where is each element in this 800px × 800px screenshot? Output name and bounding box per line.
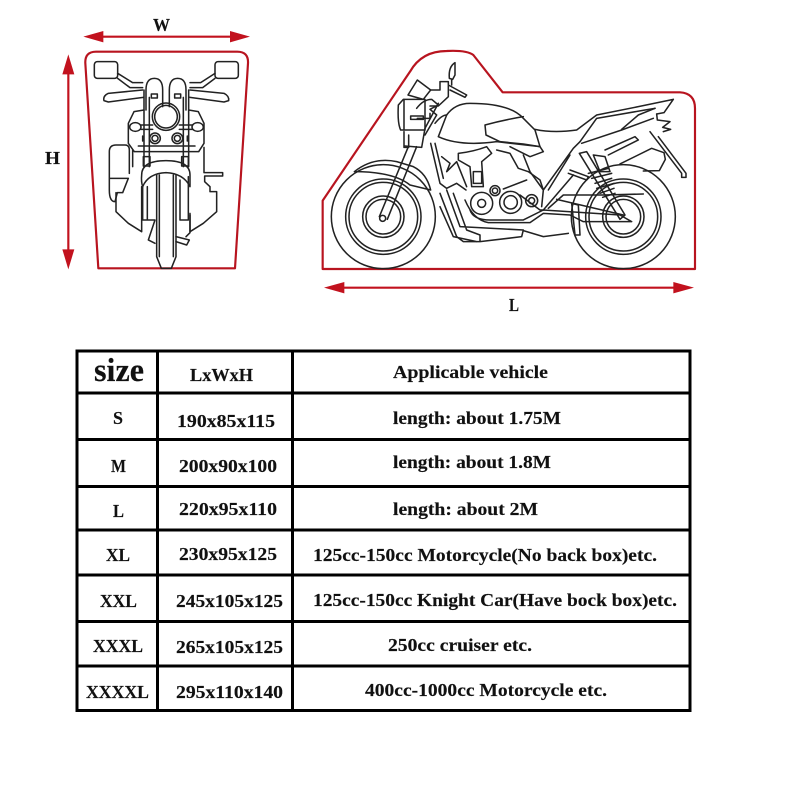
length arrow (324, 282, 694, 293)
row XXXL (93, 635, 532, 657)
row S: S (113, 408, 123, 428)
row XXXL: 250cc cruiser etc. (388, 635, 532, 655)
row L: 220x95x110 (179, 499, 277, 519)
row M: length: about 1.8M (393, 452, 551, 472)
row S (113, 408, 561, 431)
side cover outline (323, 51, 695, 269)
header row (94, 353, 548, 389)
row XXXXL: 295x110x140 (176, 682, 283, 702)
row XXL: 125cc-150cc Knight Car(Have bock box)etc. (313, 590, 677, 611)
front cover outline (85, 52, 248, 268)
row XXL: XXL (100, 591, 137, 611)
row XXXXL: 400cc-1000cc Motorcycle etc. (365, 680, 607, 700)
row S: 190x85x115 (177, 411, 275, 431)
row S: length: about 1.75M (393, 408, 561, 428)
label: W: W (153, 15, 170, 35)
row XL: 125cc-150cc Motorcycle(No back box)etc. (313, 545, 657, 566)
row M (111, 452, 551, 476)
row XL: 230x95x125 (179, 544, 277, 564)
front view diagram (62, 31, 250, 269)
table grid (76, 350, 691, 712)
header row: LxWxH (190, 365, 253, 385)
side view diagram (323, 51, 695, 293)
row XXXL: XXXL (93, 636, 143, 656)
label: L: L (509, 295, 519, 315)
row M: M (111, 456, 126, 476)
row XXXXL: XXXXL (86, 682, 149, 702)
row L: L (113, 501, 124, 521)
label: H: H (45, 148, 60, 168)
row L (113, 499, 538, 521)
row M: 200x90x100 (179, 456, 277, 476)
size table (76, 350, 691, 712)
row XXL: 245x105x125 (176, 591, 283, 611)
row XL: XL (106, 545, 130, 565)
motorcycle side line drawing (331, 63, 686, 269)
height arrow (62, 54, 74, 269)
row L: length: about 2M (393, 499, 538, 519)
header row: Applicable vehicle (393, 362, 548, 382)
row XL (106, 544, 657, 566)
axis labels (45, 15, 519, 315)
row XXXXL (86, 680, 607, 702)
row XXL (100, 590, 677, 611)
row XXXL: 265x105x125 (176, 637, 283, 657)
motorcycle front line drawing (94, 62, 238, 268)
width arrow (83, 31, 250, 42)
header row: size (94, 353, 144, 389)
